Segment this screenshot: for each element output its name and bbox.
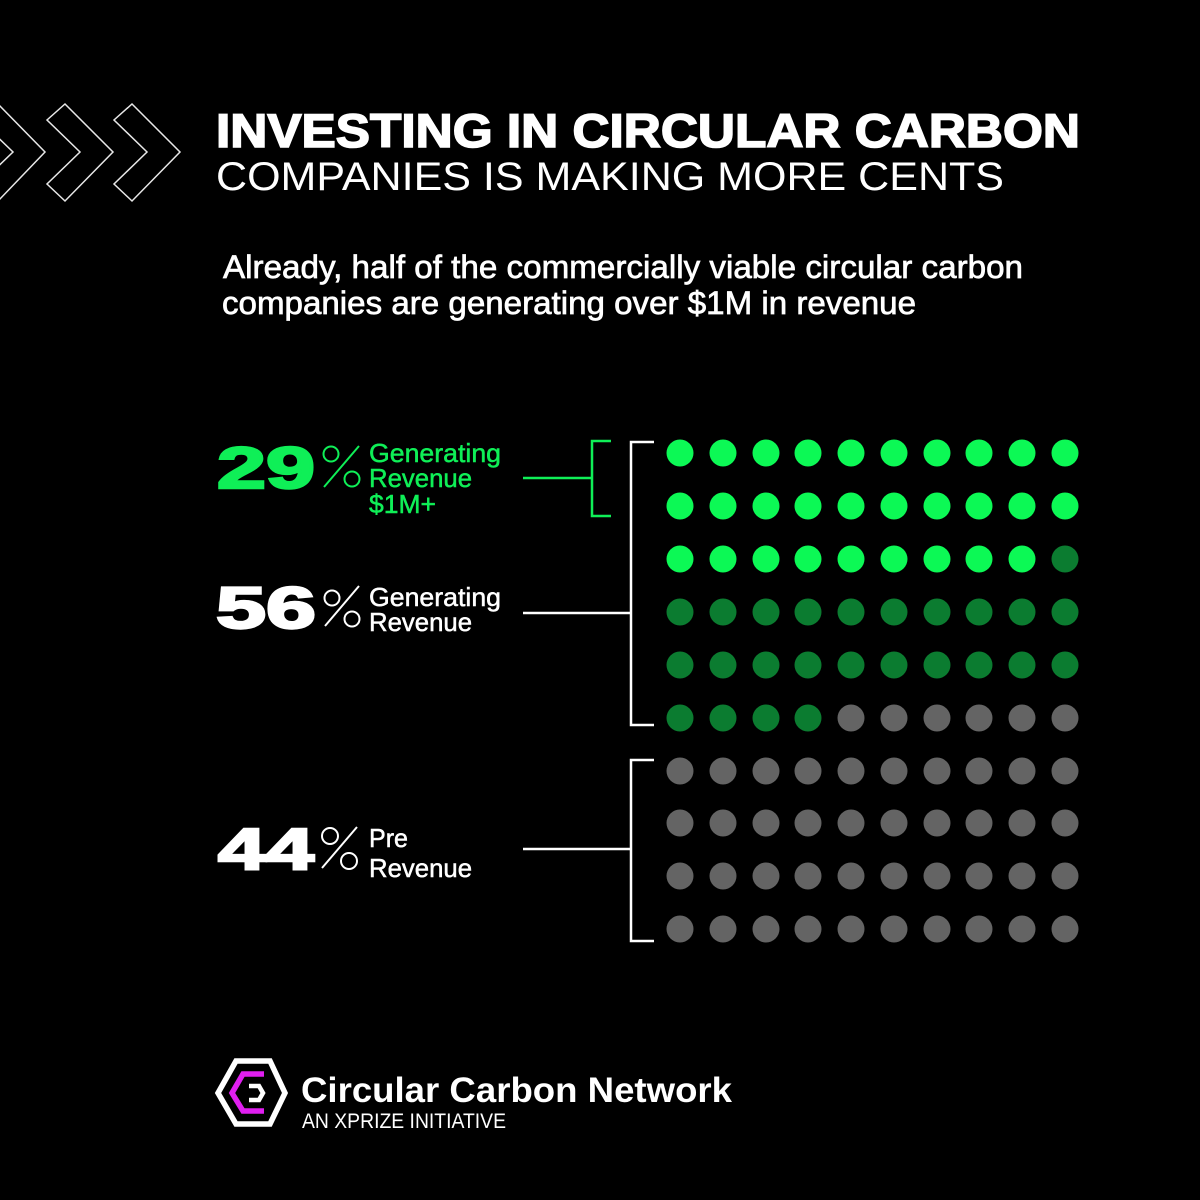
dot matrix chart — [666, 440, 1078, 942]
logo wordmark: Circular Carbon Network — [301, 1071, 733, 1110]
stat: 29% generating revenue $1M+: $1M+ — [369, 489, 436, 519]
logo wordmark — [301, 1071, 733, 1133]
stat: 44% pre revenue — [218, 817, 472, 883]
stat: 56% generating revenue: Generating — [369, 582, 501, 612]
bracket: 29% connector — [523, 441, 611, 516]
stat: 29% generating revenue $1M+: Revenue — [369, 463, 472, 493]
stat: 44% pre revenue: Pre — [369, 823, 408, 853]
stat: 44% pre revenue: Revenue — [369, 853, 472, 883]
icon: hexagon logo — [218, 1061, 285, 1124]
stat: 29% generating revenue $1M+: Generating — [369, 438, 501, 468]
stat: 29% generating revenue $1M+ — [217, 436, 501, 519]
title: INVESTING IN CIRCULAR CARBON — [216, 104, 1080, 157]
stat: 29% generating revenue $1M+: 29 — [217, 436, 315, 501]
icon: chevron arrows — [0, 104, 180, 201]
logo wordmark: AN XPRIZE INITIATIVE — [302, 1110, 506, 1133]
stat: 56% generating revenue — [216, 576, 501, 641]
dots: 29 bright green — [666, 440, 1078, 572]
dots: 27 dark green — [666, 546, 1078, 732]
stat: 56% generating revenue: 56 — [216, 576, 316, 641]
subtitle text: companies are generating over $1M in revenue — [222, 285, 916, 321]
bracket: 56% connector — [523, 442, 654, 725]
subtitle text: Already, half of the commercially viable circular carbon — [223, 249, 1023, 285]
stat: 44% pre revenue: 44 — [218, 817, 314, 882]
title: COMPANIES IS MAKING MORE CENTS — [216, 155, 1004, 199]
dots: 44 grey — [666, 704, 1078, 942]
bracket: 44% connector — [523, 760, 654, 941]
subtitle text — [222, 249, 1023, 321]
title — [216, 104, 1080, 199]
stat: 56% generating revenue: Revenue — [369, 607, 472, 637]
